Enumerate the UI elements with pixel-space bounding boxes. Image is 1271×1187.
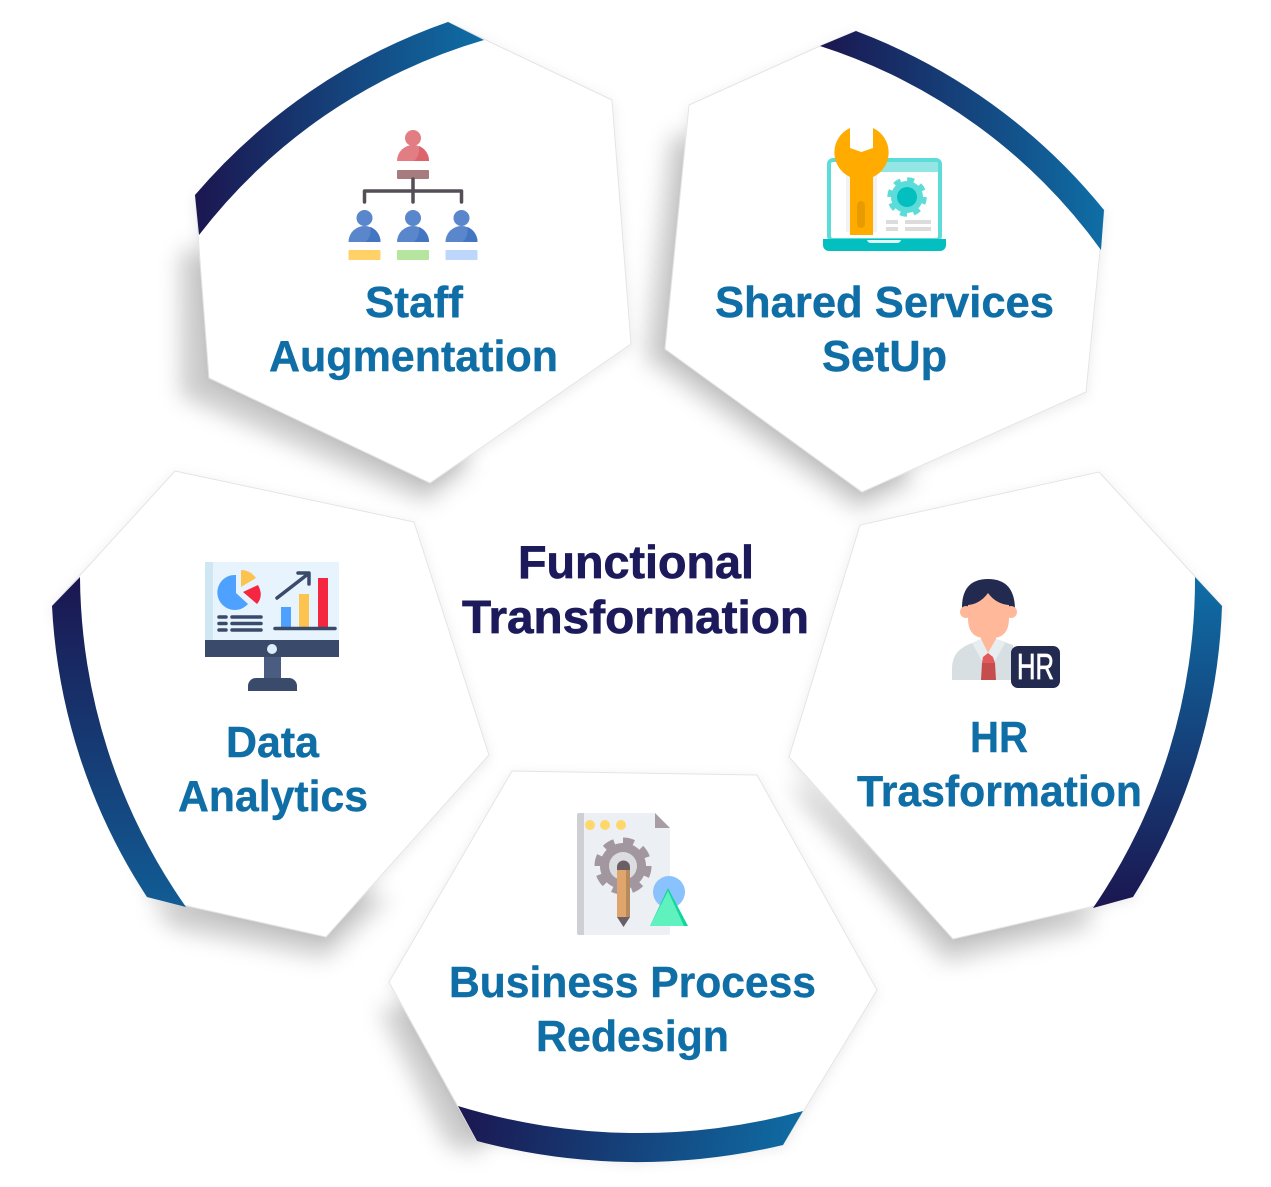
title bbox=[462, 536, 809, 643]
panel: Business Process Redesign bbox=[389, 771, 877, 1162]
label: HR Trasformation bbox=[857, 713, 1142, 816]
arc band: Business Process Redesign bbox=[458, 1106, 803, 1162]
label: Shared Services SetUp: Shared Services bbox=[715, 278, 1054, 327]
icon: org chart bbox=[348, 130, 478, 260]
label: Data Analytics: Analytics bbox=[178, 772, 368, 821]
label: Business Process Redesign: Redesign bbox=[536, 1012, 729, 1061]
label: Data Analytics bbox=[178, 718, 368, 821]
label: Shared Services SetUp bbox=[715, 278, 1054, 381]
label: HR Trasformation: Trasformation bbox=[857, 767, 1142, 816]
label: Staff Augmentation bbox=[269, 278, 558, 381]
title: Transformation bbox=[462, 591, 809, 643]
panel: Shared Services SetUp bbox=[665, 31, 1104, 492]
label: Data Analytics: Data bbox=[226, 718, 320, 767]
icon: HR person: HR bbox=[1017, 646, 1054, 687]
label: Shared Services SetUp: SetUp bbox=[822, 332, 947, 381]
title: Functional bbox=[518, 536, 754, 588]
icon: wrench and laptop bbox=[823, 128, 946, 251]
panel: Data Analytics bbox=[52, 471, 489, 937]
label: HR Trasformation: HR bbox=[970, 713, 1028, 762]
arc band: Data Analytics bbox=[52, 577, 186, 907]
icon: analytics monitor bbox=[205, 562, 339, 691]
icon: process document bbox=[577, 813, 688, 935]
label: Business Process Redesign: Business Process bbox=[449, 958, 816, 1007]
label: Business Process Redesign bbox=[449, 958, 816, 1061]
arc band: HR Trasformation bbox=[1093, 577, 1222, 908]
panel: Staff Augmentation bbox=[195, 22, 631, 483]
icon: HR person bbox=[952, 579, 1060, 688]
label: Staff Augmentation: Staff bbox=[365, 278, 463, 327]
panel: HR Trasformation bbox=[789, 472, 1222, 939]
arc band: Staff Augmentation bbox=[195, 22, 484, 235]
arc band: Shared Services bbox=[820, 31, 1104, 250]
label: Staff Augmentation: Augmentation bbox=[269, 332, 558, 381]
